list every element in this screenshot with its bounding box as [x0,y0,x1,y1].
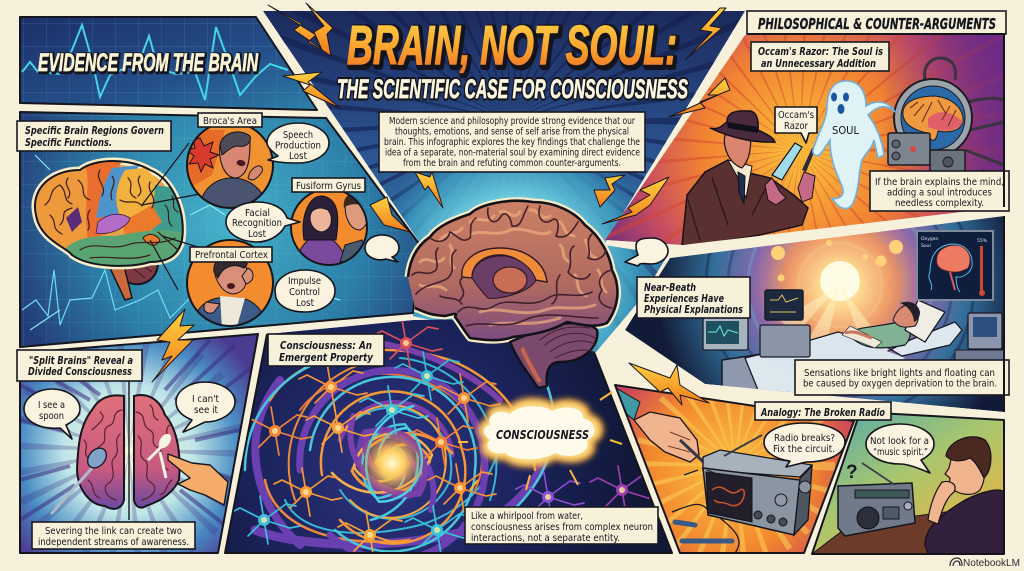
panel outline: specific brain regions [20,112,420,347]
label: broca's area: Broca's Area [203,116,257,127]
panel: consciousness swirl [225,318,672,560]
caption: whirlpool: interactions, not a separate entity. [471,533,620,544]
subtitle: THE SCIENTIFIC CASE FOR CONSCIOUSNESS [337,74,688,104]
caption: near-death experiences [637,277,750,318]
broken radio [672,435,812,553]
illustration: colored lobed brain [30,155,190,300]
caption: specific brain regions [17,121,171,151]
speech bubble: radio breaks [764,423,845,467]
callout: occam's razor: Occam's [778,110,814,121]
caption: consciousness emergent property: Consciousness: An [280,339,372,352]
caption: needless complexity: needless complexity. [895,198,984,209]
intro text block [379,112,645,172]
intro text block: Modern science and philosophy provide strong evidence that our [389,116,636,127]
speech bubble: i can't see it: I can't [192,394,219,405]
panel outline: music spirit [812,412,1004,554]
icon: pointing hand [168,454,228,505]
subtitle [337,74,688,104]
panel: occam's razor [605,35,1003,245]
chart: heartbeat wave [22,25,288,100]
empty speech bubble [365,235,399,262]
tunnel rings [704,222,974,403]
speech bubble: i see a spoon [24,389,80,439]
panel: broken radio repair [615,385,854,553]
caption: split brains [17,350,142,381]
caption: analogy broken radio: Analogy: The Broken Radio [760,406,885,419]
empty speech bubble right [625,238,668,266]
corpus callosum [462,248,547,282]
caption: needless complexity: If the brain explains the mind, [875,177,1004,188]
intro text block: from the brain and refuting common counter-arguments. [403,158,621,169]
gyri folds [420,210,606,325]
panel: music spirit [812,412,1004,554]
panel outline: broken radio repair [615,385,854,553]
label: consciousness: CONSCIOUSNESS [496,428,589,442]
panel outline: evidence header [20,17,317,110]
speech bubble: facial recognition lost [226,202,300,242]
callout: occam's razor [775,107,817,143]
caption: severing the link [32,522,195,549]
caption: severing the link: Severing the link can create two [45,526,182,537]
caption: whirlpool [465,507,658,544]
working radio [838,463,915,536]
title: brain, not soul: BRAIN, NOT SOUL: [347,14,677,76]
panel outline: consciousness swirl [225,334,672,553]
panel: center introduction [263,11,745,352]
caption: analogy broken radio [755,402,891,420]
caption: needless complexity [870,171,1009,211]
speech bubble: speech production lost: Lost [289,151,307,162]
speech bubble: music spirit: “music spirit.” [873,447,928,458]
panel outlines: occam and near-death [747,34,1004,412]
speech bubble: facial recognition lost: Recognition [232,218,282,229]
intro text block: thoughts, emotions, and sense of self arise from the physical [395,126,629,138]
caption: consciousness emergent property: Emergent Property [279,351,374,364]
oxygen brain-scan monitor: Soul [921,243,931,249]
illustration: central brain [408,201,617,388]
icon: red starburst [186,138,219,172]
speech bubble: i see a spoon: spoon [39,411,64,422]
panel: specific brain regions [20,112,420,347]
illustration: split brain [52,378,228,520]
label: prefrontal cortex [190,247,272,262]
oxygen brain-scan monitor: Oxygen [921,236,938,242]
vital-signs monitors [702,289,1003,360]
speech bubble: i can't see it [176,382,235,432]
intro text block: idea of a separate, non-material soul by examining direct evidence [385,148,640,158]
caption: near-death experiences: Near-Beath [644,281,696,294]
caption: severing the link: independent streams of awareness. [38,537,189,548]
intro text block: brain. This infographic explores the key findings that challenge the [384,137,640,148]
caption: oxygen deprivation: Sensations like bright lights and floating can [804,368,995,379]
label: soul: SOUL [832,124,860,137]
speech bubble: speech production lost [267,123,329,163]
caption: occam's razor [751,42,889,71]
speech bubble: music spirit [866,424,934,473]
heading: evidence from the brain: EVIDENCE FROM THE BRAIN [38,49,259,77]
cerebellum [108,250,158,284]
caption: occam's razor: an Unnecessary Addition [761,57,876,70]
circle: fusiform gyrus [290,192,368,266]
oxygen brain-scan monitor [917,231,993,300]
label: fusiform gyrus [292,178,365,192]
panel outline: split brains [20,334,258,553]
caption: consciousness emergent property [268,334,384,366]
caption: oxygen deprivation [795,360,1009,395]
title: brain, not soul: BRAIN, NOT SOUL: [349,16,679,78]
speech bubble: radio breaks: Radio breaks? [774,433,835,444]
circle: prefrontal cortex [187,240,273,330]
machine with brain [887,56,1003,170]
callout: occam's razor: Razor [784,121,809,132]
icon: white spoon [148,432,174,478]
speech bubble: radio breaks: Fix the circuit. [773,444,835,455]
speech bubble: facial recognition lost: Facial [245,208,270,219]
speech bubble: impulse control lost: Impulse [288,276,321,287]
speech bubble: i can't see it: see it [194,405,218,416]
heading: evidence from the brain: EVIDENCE FROM THE BRAIN [39,50,260,78]
label: fusiform gyrus: Fusiform Gyrus [296,181,361,192]
speech bubble: music spirit: Not look for a [870,436,929,447]
panel: near-death experiences [625,216,1003,412]
hand with tool [617,388,702,463]
label: prefrontal cortex: Prefrontal Cortex [195,250,268,261]
speech bubble: i see a spoon: I see a [38,400,65,411]
figure: detective [682,111,815,245]
thinking man [925,437,1004,554]
speech bubble: speech production lost: Production [275,140,321,152]
caption: specific brain regions: Specific Brain Regions Govern [25,124,164,137]
hospital bed and patient [722,300,962,395]
caption: whirlpool: consciousness arises from complex neuron [471,522,653,533]
cerebellum and stem [510,323,597,388]
speech bubble: speech production lost: Speech [283,130,313,141]
icon: spoon [52,444,110,513]
panel: evidence header [20,17,317,110]
title: brain, not soul [347,14,679,78]
panel: split brains [20,334,258,553]
logo: notebooklm: NotebookLM [963,558,1020,569]
speech bubble: facial recognition lost: Lost [248,229,266,240]
lightning bolts [152,3,730,405]
speech bubble: impulse control lost: Control [289,287,320,298]
heading: evidence from the brain [38,49,260,78]
caption: needless complexity: adding a soul introduces [887,188,992,198]
speech bubble: impulse control lost: Lost [296,298,314,309]
oxygen brain-scan monitor: 55% [977,238,988,244]
subtitle: THE SCIENTIFIC CASE FOR CONSCIOUSNESS [337,74,688,104]
caption: split brains: Divided Consciousness [28,365,132,378]
caption: near-death experiences: Physical Explanations [644,303,743,316]
leader lines [142,143,205,290]
caption: whirlpool: Like a whirlpool from water, [471,511,583,522]
icon: question mark: ? [846,462,858,483]
light orbs [771,240,903,282]
circle: broca's area [186,122,273,210]
figure: ghost [813,81,895,209]
caption: occam's razor: Occam's Razor: The Soul is [758,45,883,58]
caption: specific brain regions: Specific Functions. [25,136,112,149]
chart: spiral arms [245,340,554,560]
cloud bubble: consciousness [458,392,622,490]
neurons [232,319,658,559]
label: broca's area [198,113,262,127]
caption: split brains: "Split Brains" Reveal a [29,354,133,367]
table [814,511,947,553]
icon: straight razor [772,143,802,180]
tools [675,522,732,541]
caption: near-death experiences: Experiences Have [644,292,724,305]
speech bubble: impulse control lost [275,270,335,312]
